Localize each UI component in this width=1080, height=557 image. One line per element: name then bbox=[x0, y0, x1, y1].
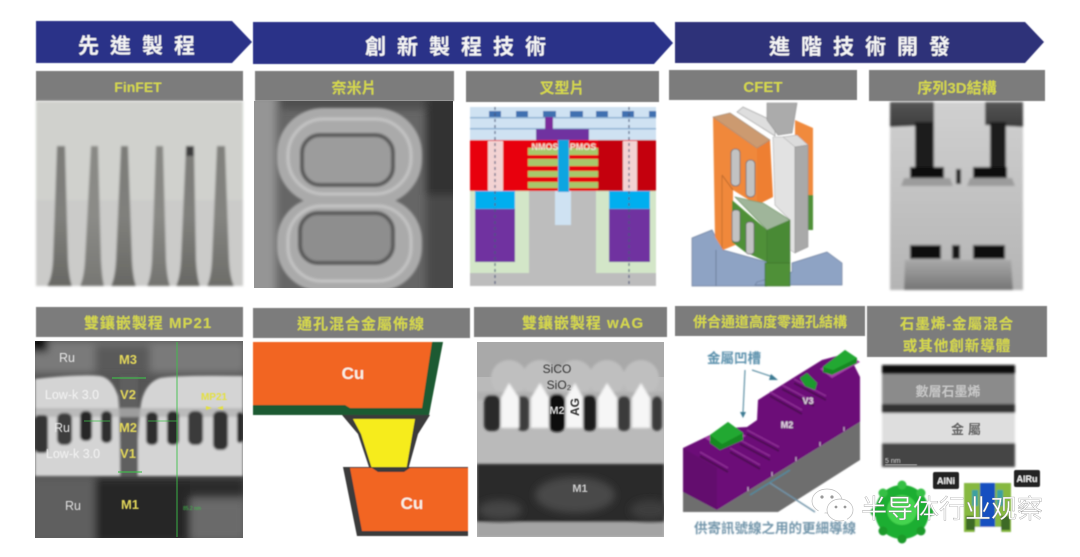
header: dual damascene wAG: 雙鑲嵌製程 wAG bbox=[522, 314, 644, 332]
header: zero-height via bbox=[675, 306, 865, 336]
labels: layers: Ru bbox=[65, 499, 81, 513]
micrograph: graphene and metal bbox=[882, 365, 1015, 467]
header: dual damascene MP21: 雙鑲嵌製程 MP21 bbox=[84, 314, 212, 332]
micrograph: wAG bbox=[477, 342, 670, 537]
banner: advanced technology development: 進階技術開發 bbox=[769, 36, 961, 59]
labels: layers bbox=[45, 351, 227, 513]
labels: layers: Ru bbox=[59, 351, 75, 365]
micrograph: sequential 3D bbox=[890, 102, 1023, 290]
labels: materials: M1 bbox=[572, 483, 588, 495]
header: graphene-metal hybrid: 石墨烯-金屬混合 bbox=[900, 315, 1014, 333]
watermark text: 半导体行业观察 bbox=[861, 494, 1043, 524]
labels: layers: Ru bbox=[54, 421, 70, 435]
labels: layers: 85.2 nm bbox=[183, 506, 201, 512]
header: graphene-metal hybrid: 或其他創新導體 bbox=[903, 337, 1011, 355]
header: CFET: CFET bbox=[743, 79, 783, 96]
labels: layers: M3 bbox=[119, 352, 137, 367]
diagram: forksheet cross-section: NMOS bbox=[532, 142, 558, 152]
banner: advanced technology development bbox=[675, 22, 1044, 63]
labels: layers: V2 bbox=[120, 387, 136, 402]
labels: layers: Low-k 3.0 bbox=[46, 447, 100, 461]
label: scale: 5 nm bbox=[885, 458, 901, 465]
labels: materials: SiCO bbox=[543, 362, 571, 376]
diagram: 3D metal structure: M2 bbox=[781, 420, 793, 430]
labels: layers: Low-k 3.0 bbox=[45, 388, 99, 402]
diagram: via cross-section: Cu bbox=[342, 364, 364, 383]
micrograph: nanosheet bbox=[254, 101, 453, 288]
model: AlNi green gear bbox=[870, 480, 934, 544]
micrograph: fins bbox=[36, 101, 243, 286]
label: AlNi bbox=[933, 472, 959, 489]
labels: materials: AG bbox=[568, 398, 582, 416]
banner: innovative process technology: 創新製程技術 bbox=[365, 35, 557, 59]
banner: advanced process bbox=[36, 21, 252, 63]
panel: dual damascene wAG bbox=[474, 307, 670, 537]
label: few-layer graphene: 數層石墨烯 bbox=[915, 384, 981, 399]
diagram: CFET 3D structure bbox=[692, 103, 842, 286]
labels: materials: M2 bbox=[549, 405, 565, 417]
panel: sequential 3D bbox=[869, 70, 1045, 290]
header: FinFET: FinFET bbox=[114, 79, 162, 95]
header: sequential 3D: 序列3D結構 bbox=[917, 79, 997, 97]
header: sequential 3D bbox=[869, 70, 1045, 101]
banner: innovative process technology bbox=[253, 22, 673, 64]
diagram: 3D metal structure: 金屬凹槽 bbox=[707, 350, 761, 366]
panel: nanosheet bbox=[254, 70, 455, 288]
header: dual damascene wAG bbox=[474, 307, 667, 337]
panel: via hybrid metal wiring bbox=[253, 308, 470, 536]
diagram: forksheet cross-section bbox=[470, 107, 656, 286]
diagram: 3D metal structure bbox=[683, 350, 860, 536]
label: metal: 金屬 bbox=[951, 422, 985, 437]
header: forksheet: 叉型片 bbox=[539, 80, 585, 97]
header: nanosheet bbox=[255, 71, 454, 101]
model: AlRu blue and green bbox=[964, 483, 1011, 533]
panel: CFET bbox=[669, 70, 857, 286]
labels: layers: MP21 bbox=[201, 392, 227, 403]
labels: layers: M2 bbox=[119, 420, 137, 435]
label: AlNi: AlNi bbox=[937, 476, 955, 486]
header: forksheet bbox=[466, 71, 659, 102]
icon: WeChat bubbles bbox=[812, 489, 853, 523]
measurement lines bbox=[84, 342, 178, 537]
header: nanosheet: 奈米片 bbox=[331, 80, 377, 97]
labels: materials bbox=[543, 362, 588, 495]
header: CFET bbox=[669, 70, 857, 100]
diagram: 3D metal structure: 供寄訊號線之用的更細導線 bbox=[694, 520, 856, 536]
label: AlRu: AlRu bbox=[1016, 474, 1038, 484]
banner: advanced process: 先進製程 bbox=[78, 35, 206, 58]
panel: graphene-metal hybrid bbox=[867, 306, 1047, 544]
diagram: via cross-section: Cu bbox=[401, 494, 423, 513]
panel: forksheet bbox=[466, 71, 659, 286]
panel: zero-height via bbox=[675, 306, 865, 536]
panel: FinFET bbox=[36, 71, 243, 286]
header: graphene-metal hybrid bbox=[867, 306, 1047, 357]
header: via hybrid metal wiring bbox=[253, 308, 470, 338]
labels: layers: M1 bbox=[121, 497, 139, 512]
diagram: 3D metal structure: V3 bbox=[802, 396, 814, 406]
panel: dual damascene MP21 bbox=[30, 307, 245, 543]
header: FinFET bbox=[36, 71, 243, 101]
micrograph: MP21 bbox=[30, 336, 245, 543]
labels: layers: V1 bbox=[120, 446, 136, 461]
diagram: via cross-section bbox=[253, 342, 468, 536]
header: zero-height via: 併合通道高度零通孔結構 bbox=[693, 314, 847, 330]
header: via hybrid metal wiring: 通孔混合金屬佈線 bbox=[297, 315, 425, 333]
label: AlRu bbox=[1014, 470, 1040, 487]
labels: materials: SiO₂ bbox=[547, 378, 572, 392]
diagram: forksheet cross-section: PMOS bbox=[570, 142, 596, 152]
header: dual damascene MP21 bbox=[36, 307, 243, 337]
